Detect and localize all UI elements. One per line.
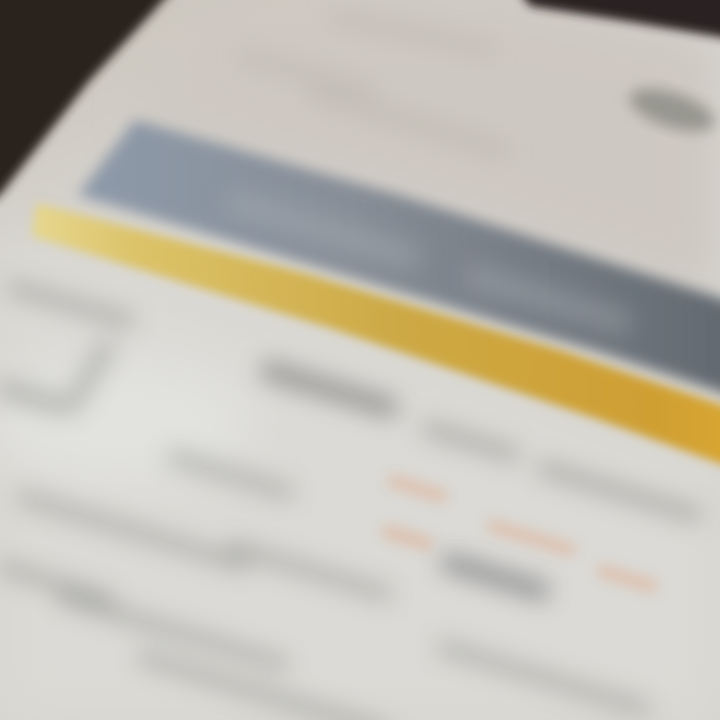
blue-gray header band — [78, 120, 720, 405]
gold highlight band — [32, 203, 720, 478]
smudges: orange annotations — [382, 475, 657, 592]
band shading texture — [224, 190, 633, 334]
dark table corner: top left — [0, 0, 190, 215]
smudges: heading text above band — [237, 10, 511, 158]
smudges: body text lines — [0, 280, 703, 720]
dark table corner: top right — [505, 0, 720, 42]
smudge: top right label — [625, 80, 719, 140]
